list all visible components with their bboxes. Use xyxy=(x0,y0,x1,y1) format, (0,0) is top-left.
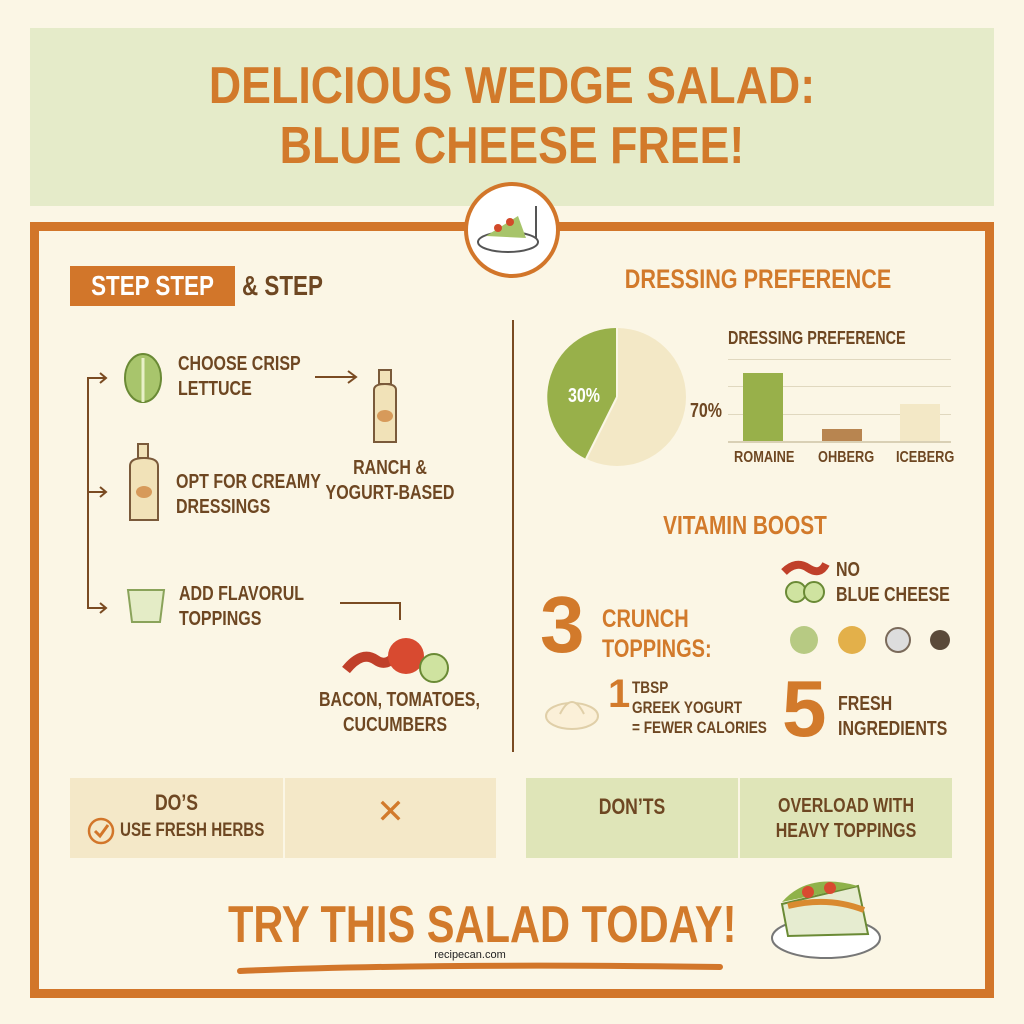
panel: do's xyxy=(70,778,496,858)
icon: bacon tomato cucumber: CUCUMBERS xyxy=(343,714,447,736)
step 1: CHOOSE CRISP xyxy=(178,353,301,375)
bar chart: OHBERG xyxy=(818,449,874,466)
bar chart: ROMAINE xyxy=(734,449,794,466)
stat: 5 fresh xyxy=(782,664,947,753)
header band xyxy=(30,28,994,206)
stat: 5 fresh: 5 xyxy=(782,664,826,753)
bar chart xyxy=(728,328,954,466)
step 2: OPT FOR CREAMY xyxy=(176,471,321,493)
step 3 xyxy=(126,583,304,630)
step heading xyxy=(70,266,323,306)
panel: do's: ✕ xyxy=(376,793,405,831)
step heading: STEP STEP xyxy=(91,270,214,301)
call to action: TRY THIS SALAD TODAY! xyxy=(228,896,737,954)
icon: bacon tomato cucumber: BACON, TOMATOES, xyxy=(319,689,480,711)
stat: 3 crunch toppings: 3 xyxy=(540,580,584,669)
bar chart: DRESSING PREFERENCE xyxy=(728,328,906,348)
panel: don'ts xyxy=(526,778,952,858)
pie chart: 70% xyxy=(690,400,722,422)
icon: plate logo xyxy=(464,182,560,278)
panel: don'ts: OVERLOAD WITH xyxy=(778,795,914,817)
panel: do's: DO’S xyxy=(155,790,198,815)
bar chart: ICEBERG xyxy=(896,449,954,466)
stat: 3 crunch toppings: CRUNCH xyxy=(602,605,689,633)
title xyxy=(209,57,815,175)
stat: 3 crunch toppings: TOPPINGS: xyxy=(602,635,712,663)
icons: no blue cheese: BLUE CHEESE xyxy=(836,584,950,606)
title: DELICIOUS WEDGE SALAD: xyxy=(209,57,815,115)
pie chart xyxy=(547,328,722,466)
step 3: TOPPINGS xyxy=(179,608,261,630)
bracket arrows xyxy=(87,370,401,620)
vitamin heading: VITAMIN BOOST xyxy=(663,510,827,540)
step 3: ADD FLAVORUL xyxy=(179,583,304,605)
stat: yogurt xyxy=(545,672,767,737)
title: BLUE CHEESE FREE! xyxy=(280,117,744,175)
step 2: DRESSINGS xyxy=(176,496,270,518)
icons: no blue cheese xyxy=(781,559,950,606)
step heading: & STEP xyxy=(242,270,323,301)
panel: don'ts: DON’TS xyxy=(599,794,665,819)
icons: no blue cheese: NO xyxy=(836,559,860,581)
divider xyxy=(512,320,514,752)
step 1 xyxy=(124,353,301,403)
icon: ranch bottle xyxy=(326,369,454,504)
dressing heading: DRESSING PREFERENCE xyxy=(625,264,891,294)
stat: 5 fresh: INGREDIENTS xyxy=(838,718,947,740)
stat: yogurt: 1 xyxy=(608,672,630,716)
stat: yogurt: TBSP xyxy=(632,678,668,697)
stat: 5 fresh: FRESH xyxy=(838,693,892,715)
stat: 3 crunch toppings xyxy=(540,580,712,669)
icons: ingredients xyxy=(790,626,950,654)
step 2 xyxy=(129,443,321,521)
icon: bacon tomato cucumber xyxy=(319,638,480,736)
panel: do's: USE FRESH HERBS xyxy=(120,820,264,841)
step 1: LETTUCE xyxy=(178,378,252,400)
icon: salad plate xyxy=(771,882,881,959)
stat: yogurt: GREEK YOGURT xyxy=(632,698,742,717)
icon: ranch bottle: YOGURT-BASED xyxy=(326,482,454,504)
panel: don'ts: HEAVY TOPPINGS xyxy=(776,820,916,842)
call to action: recipecan.com xyxy=(434,949,506,961)
frame xyxy=(30,222,994,998)
pie chart: 30% xyxy=(568,384,600,406)
stat: yogurt: = FEWER CALORIES xyxy=(632,718,767,737)
icon: ranch bottle: RANCH & xyxy=(353,457,427,479)
